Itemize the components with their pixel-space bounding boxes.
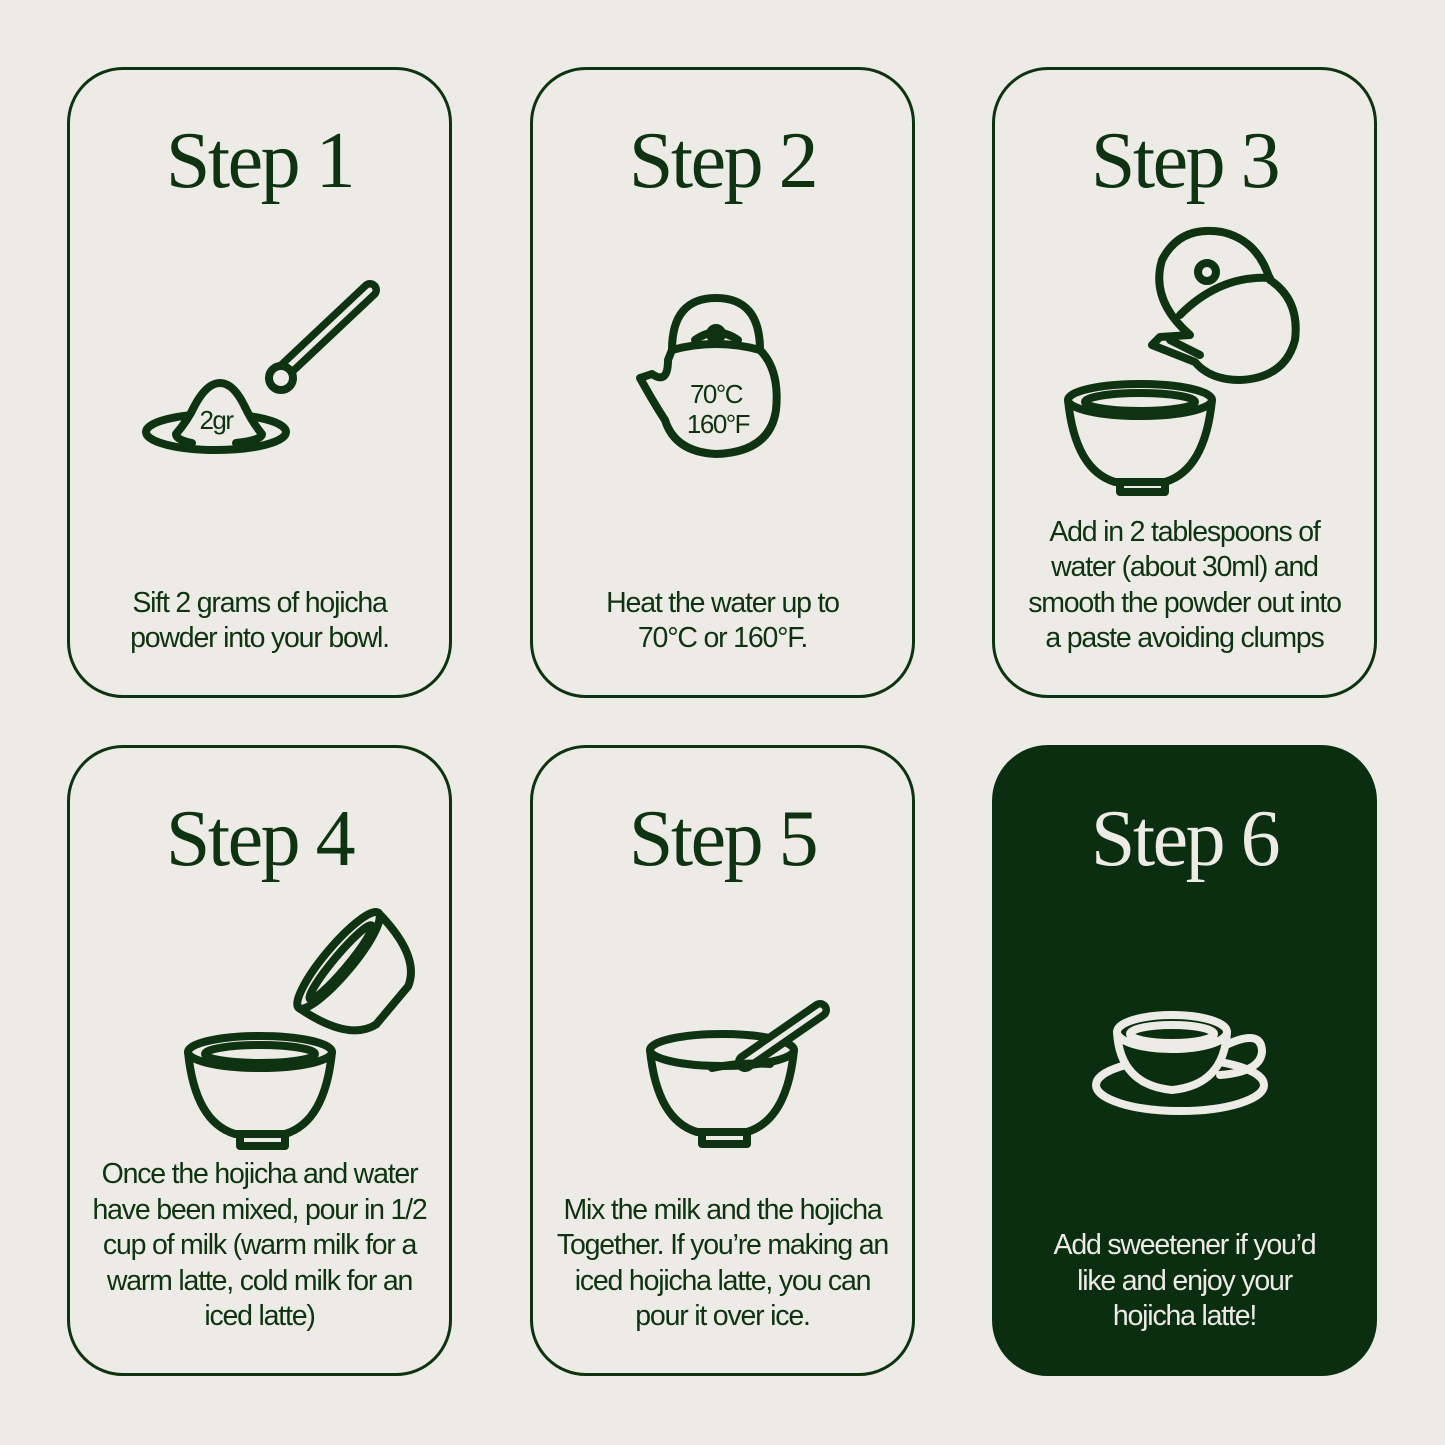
panel: step 1 — [67, 67, 452, 698]
text: step 1: powder into your bowl. — [130, 622, 389, 654]
heading: step 5: Step 5 — [629, 795, 816, 883]
text: step 3 — [1028, 516, 1341, 654]
text: step 6: like and enjoy your — [1077, 1265, 1292, 1297]
icon: kettle with temperature — [636, 294, 781, 458]
icon: tea cup on saucer — [1092, 1011, 1268, 1115]
text: step 4: warm latte, cold milk for an — [107, 1265, 412, 1297]
heading: step 1: Step 1 — [166, 117, 353, 205]
text: step 4: Once the hojicha and water — [102, 1158, 417, 1190]
text: step 3: a paste avoiding clumps — [1045, 622, 1324, 654]
text: step 4: iced latte) — [204, 1300, 315, 1332]
heading: step 3: Step 3 — [1091, 117, 1278, 205]
text: step 3: water (about 30ml) and — [1051, 551, 1318, 583]
text: step 5: pour it over ice. — [635, 1300, 810, 1332]
panel: step 6 — [992, 745, 1377, 1376]
text: step 4 — [92, 1158, 426, 1332]
icon: kettle with temperature: 160°F — [687, 409, 750, 439]
text: step 5: Together. If you’re making an — [557, 1229, 888, 1261]
icon: pouring milk into bowl — [184, 908, 415, 1150]
text: step 5: iced hojicha latte, you can — [575, 1265, 870, 1297]
icon: powder pile and spoon — [142, 280, 380, 454]
heading: step 2: Step 2 — [629, 117, 816, 205]
icon: powder pile and spoon: 2gr — [199, 405, 234, 435]
panel: step 4 — [67, 745, 452, 1376]
text: step 2: 70°C or 160°F. — [638, 622, 807, 654]
panel: step 3 — [992, 67, 1377, 698]
panel: step 2 — [530, 67, 915, 698]
heading: step 4: Step 4 — [166, 795, 353, 883]
text: step 6: Add sweetener if you’d — [1054, 1229, 1315, 1261]
text: step 3: smooth the powder out into — [1028, 587, 1341, 619]
text: step 6 — [1054, 1229, 1315, 1332]
text: step 2: Heat the water up to — [606, 587, 839, 619]
text: step 6: hojicha latte! — [1113, 1300, 1256, 1332]
icon: kettle with temperature: 70°C — [690, 379, 743, 409]
heading: step 6: Step 6 — [1091, 795, 1278, 883]
text: step 5: Mix the milk and the hojicha — [563, 1194, 882, 1226]
icon: teapot pouring into bowl — [1064, 226, 1300, 496]
icon: bowl with whisking spoon — [646, 1000, 830, 1148]
text: step 2 — [606, 587, 839, 654]
panel: step 5 — [530, 745, 915, 1376]
text: step 1 — [130, 587, 389, 654]
text: step 3: Add in 2 tablespoons of — [1049, 516, 1320, 548]
text: step 1: Sift 2 grams of hojicha — [132, 587, 387, 619]
text: step 4: have been mixed, pour in 1/2 — [92, 1194, 426, 1226]
text: step 5 — [557, 1194, 888, 1332]
text: step 4: cup of milk (warm milk for a — [103, 1229, 416, 1261]
